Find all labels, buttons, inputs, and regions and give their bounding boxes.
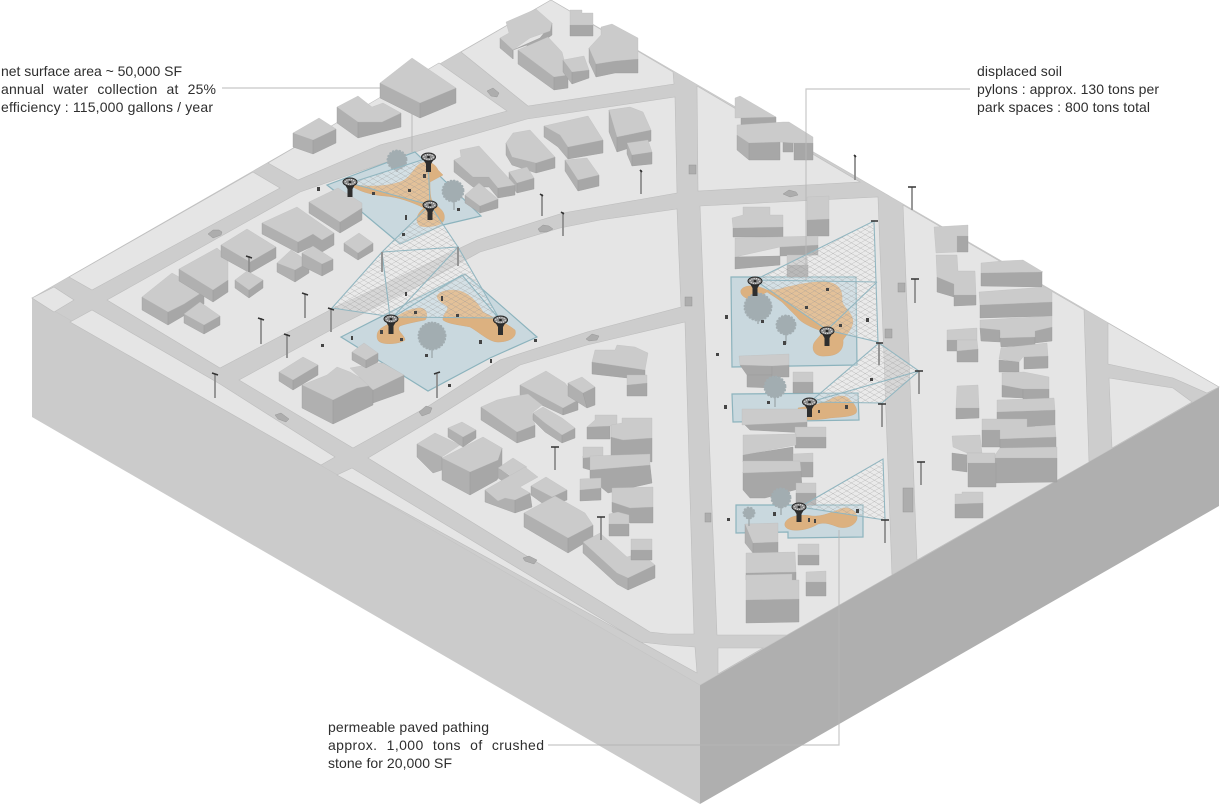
callout: surface area and water collection: annual water collection at 25%: [1, 81, 216, 97]
street lamps: [212, 155, 925, 543]
callout: permeable paved pathing: approx. 1,000 tons of crushed: [328, 737, 544, 753]
people: [317, 174, 873, 523]
pylons: [343, 153, 834, 522]
callout: displaced soil: displaced soil: [977, 63, 1062, 79]
leader line: displaced soil: [806, 89, 970, 280]
callout: permeable paved pathing: stone for 20,000 SF: [328, 755, 452, 771]
callout: permeable paved pathing: permeable paved pathing: [328, 719, 489, 735]
buildings: east column: [934, 225, 1057, 518]
base block left face: [32, 298, 700, 804]
permeable paved pathing: [350, 162, 857, 530]
callout: surface area and water collection: net surface area ~ 50,000 SF: [1, 63, 182, 79]
callout: displaced soil: park spaces : 800 tons total: [977, 99, 1150, 115]
buildings: east of main road: [732, 96, 829, 623]
panel: park plazas ground: [327, 152, 863, 538]
callout: surface area and water collection: [1, 63, 216, 115]
canopy meshes: [332, 158, 919, 520]
buildings: north group: [454, 9, 652, 213]
callout: displaced soil: [977, 63, 1159, 115]
leader line: pathing: [548, 530, 839, 745]
leader line: surface area: [222, 88, 412, 152]
trees: [388, 151, 795, 526]
base block right face: [700, 387, 1219, 804]
callout: surface area and water collection: efficiency : 115,000 gallons / year: [1, 99, 213, 115]
cars: [208, 88, 913, 564]
callout: displaced soil: pylons : approx. 130 tons per: [977, 81, 1159, 97]
callout: permeable paved pathing: [328, 719, 544, 771]
buildings: central-south group: [279, 343, 655, 590]
buildings: northwest group: [142, 58, 456, 334]
